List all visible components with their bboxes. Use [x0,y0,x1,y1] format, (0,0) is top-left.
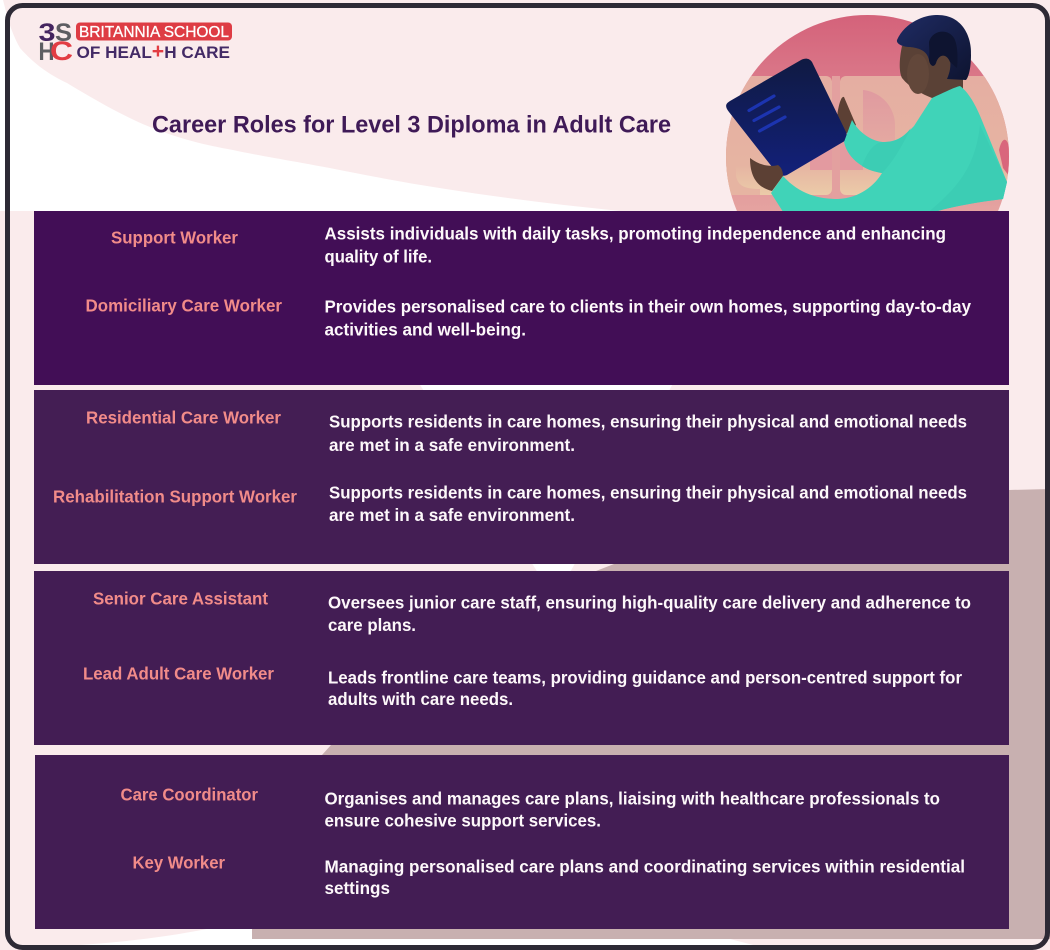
description: Senior Care Assistant: care plans. [328,615,416,635]
description: Domiciliary Care Worker: Provides personalised care to clients in their own homes, supporting day-to-day [324,296,971,316]
background: white sweep under header [0,0,767,600]
role: Domiciliary Care Worker: Domiciliary Care Worker [86,296,282,316]
teal sweater [771,86,1007,215]
description: Care Coordinator: ensure cohesive support services. [324,810,601,830]
description: Lead Adult Care Worker [328,668,962,709]
logo mark: 3 [38,19,56,47]
role: Senior Care Assistant: Senior Care Assistant [93,588,268,608]
hair dark [929,32,958,68]
role: Rehabilitation Support Worker: Rehabilitation Support Worker [53,486,297,506]
role: Residential Care Worker: Residential Care Worker [86,408,281,428]
neck and head [900,46,963,98]
logo mark: S [55,19,72,47]
logo: Britannia School of Health Care [38,19,232,66]
description: Lead Adult Care Worker: adults with care needs. [328,689,513,709]
description: Domiciliary Care Worker: activities and well-being. [324,320,526,340]
illustration: carer with clipboard [726,15,1009,211]
logo second line: OF HEAL+H CARE [76,40,230,63]
description: Lead Adult Care Worker: Leads frontline care teams, providing guidance and person-centred support for [328,668,962,688]
clipboard [726,59,847,176]
description: Key Worker: Managing personalised care plans and coordinating services within residential [324,856,965,876]
logo mark: H [38,38,54,66]
description: Key Worker: settings [324,878,390,898]
description: Rehabilitation Support Worker: Supports residents in care homes, ensuring their physical and emotional needs [329,482,967,502]
clipboard lines [749,96,785,131]
panel: residential and rehabilitation roles [34,390,1009,564]
sweater shading [862,125,1007,215]
description: Support Worker [324,224,946,266]
description: Support Worker: Assists individuals with daily tasks, promoting independence and enhancing [324,224,946,244]
panel: senior and lead roles [34,571,1009,745]
description: Support Worker: quality of life. [324,246,432,266]
description: Care Coordinator [324,788,940,830]
description: Residential Care Worker: are met in a safe environment. [329,435,575,455]
background: taupe shape [252,489,1050,939]
front hand [750,158,783,191]
illustration backdrop circle [726,15,1009,211]
description: Senior Care Assistant: Oversees junior care staff, ensuring high-quality care delivery and adherence to [328,592,971,612]
background: white wedge at bottom [40,925,770,950]
description: Care Coordinator: Organises and manages care plans, liaising with healthcare professionals to [324,788,940,808]
face shade [908,84,922,94]
description: Residential Care Worker: Supports residents in care homes, ensuring their physical and emotional needs [329,412,967,432]
description: Rehabilitation Support Worker [329,482,967,525]
logo mark: C [50,36,73,66]
role: Key Worker: Key Worker [132,852,225,872]
back hand [837,97,856,134]
role: Support Worker: Support Worker [111,228,238,248]
logo red banner: BRITANNIA SCHOOL [79,24,229,41]
role: Care Coordinator: Care Coordinator [120,784,258,804]
description: Domiciliary Care Worker [324,296,971,340]
panel: support and domiciliary roles [34,211,1009,385]
title: Career Roles for Level 3 Diploma in Adult Care [152,112,671,138]
description: Residential Care Worker [329,412,967,455]
description: Senior Care Assistant [328,592,971,635]
hair [897,15,971,80]
description: Rehabilitation Support Worker: are met in a safe environment. [329,505,575,525]
panel: coordinator and key worker roles [35,755,1009,929]
logo mark [38,19,73,66]
description: Key Worker [324,856,965,898]
role: Lead Adult Care Worker: Lead Adult Care Worker [83,664,274,684]
